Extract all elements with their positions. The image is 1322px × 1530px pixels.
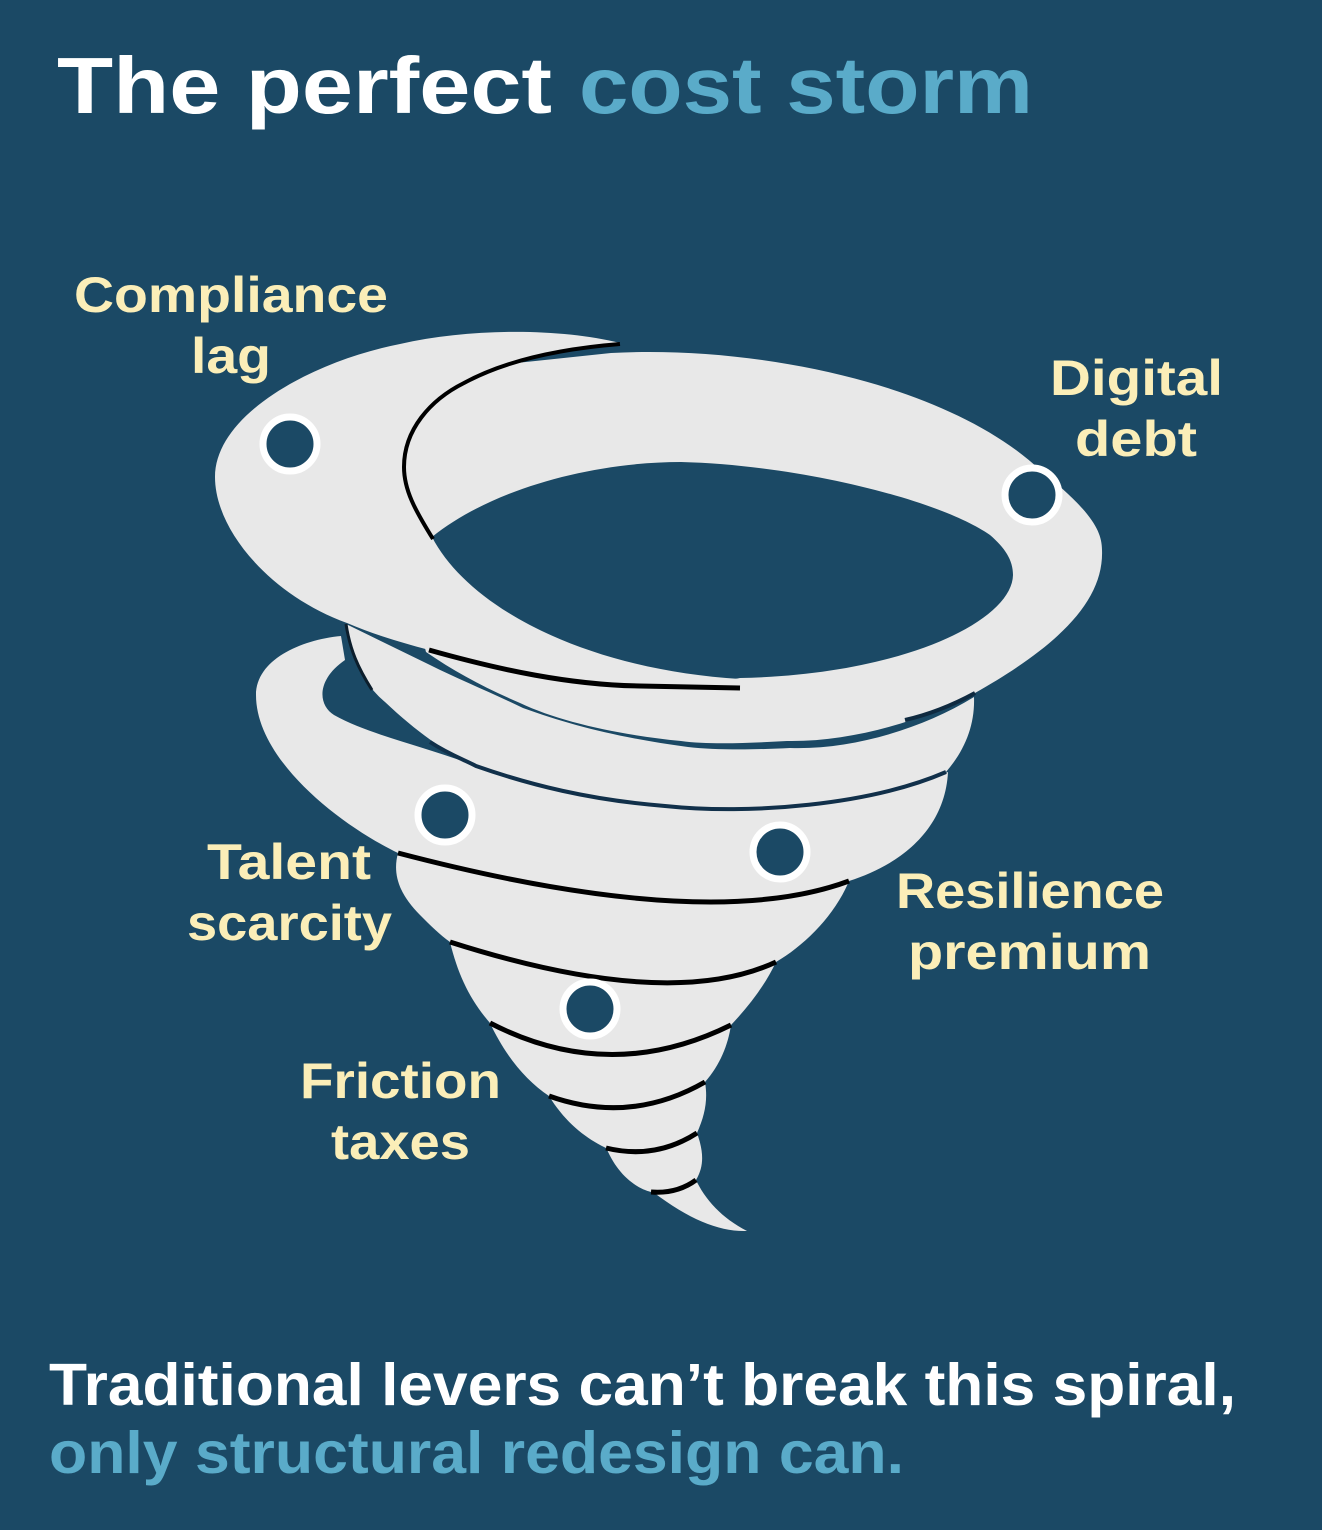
closing statement: Traditional levers can’t break this spiral, (49, 1352, 1236, 1418)
label: friction taxes: Friction (300, 1053, 501, 1109)
label: compliance lag: Compliance (74, 267, 388, 323)
title (57, 41, 1033, 130)
label: talent scarcity (187, 834, 392, 951)
top ring right (380, 352, 1102, 743)
marker: compliance lag (263, 417, 317, 471)
closing statement (49, 1352, 1236, 1486)
label: digital debt: debt (1075, 411, 1197, 467)
tornado segment 7 (606, 1120, 702, 1192)
tornado segment 4 (450, 940, 776, 1055)
marker: digital debt (1005, 468, 1059, 522)
tornado segment 1 band (346, 624, 974, 809)
title: The perfect (57, 41, 552, 130)
label: resilience premium: Resilience (896, 863, 1164, 919)
label: compliance lag: lag (191, 328, 271, 384)
label: talent scarcity: scarcity (187, 895, 392, 951)
label: compliance lag (74, 267, 388, 384)
label: friction taxes (300, 1053, 501, 1170)
label: talent scarcity: Talent (207, 834, 371, 890)
tornado illustration (215, 332, 1102, 1231)
label: friction taxes: taxes (331, 1114, 470, 1170)
label: digital debt (1050, 350, 1223, 467)
tornado segment 2 with hook (256, 636, 948, 902)
tornado tail (653, 1178, 747, 1231)
closing statement: only structural redesign can. (49, 1420, 904, 1486)
marker: resilience premium (753, 825, 807, 879)
marker: talent scarcity (418, 788, 472, 842)
label: digital debt: Digital (1050, 350, 1223, 406)
marker: friction taxes (563, 982, 617, 1036)
label: resilience premium (896, 863, 1164, 980)
top ring left crescent (215, 332, 740, 690)
title: cost storm (579, 41, 1033, 130)
tornado segment 5 (490, 1000, 731, 1108)
label: resilience premium: premium (908, 924, 1151, 980)
tornado segment 6 (549, 1060, 706, 1152)
tornado segment 3 (396, 850, 849, 983)
